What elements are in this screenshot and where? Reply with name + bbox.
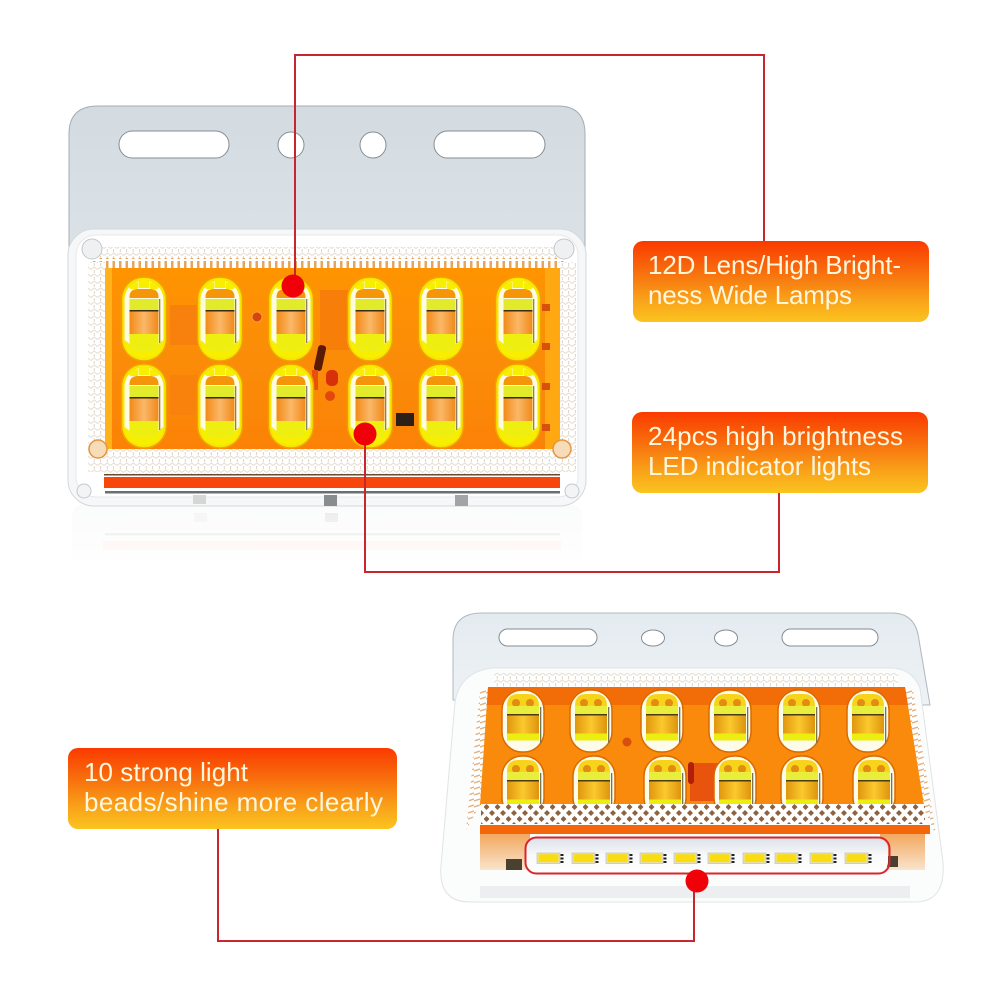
callout: 10 strong light beads [68, 748, 397, 829]
lower textured band and orange strip [480, 804, 930, 898]
leader line: lens callout [295, 55, 764, 285]
lamp beads: bottom row [122, 364, 540, 448]
lower textured band and orange strip [89, 440, 571, 506]
mounting plate with slots and holes [69, 106, 585, 250]
marker dot: light beads [686, 870, 708, 892]
callout: 10 strong light beads: beads/shine more clearly [84, 787, 383, 817]
callout: 24pcs indicator lights [632, 412, 928, 493]
product photo: top lamp, front view [68, 106, 586, 565]
mounting plate with slots and holes [453, 613, 930, 705]
callout: 24pcs indicator lights: 24pcs high brightness [648, 421, 903, 451]
leader line: indicator callout [365, 434, 779, 572]
marker dot: lens [282, 274, 304, 298]
LED strip with 10 light beads [526, 838, 888, 873]
orange reflector board [105, 268, 560, 449]
callout: 12D lens [633, 241, 929, 322]
callout: 24pcs indicator lights: LED indicator lights [648, 451, 871, 481]
clear lens housing [441, 668, 943, 902]
reflection under top lamp [72, 505, 582, 565]
callout: 10 strong light beads: 10 strong light [84, 757, 249, 787]
orange reflector board [480, 687, 924, 805]
callout: 12D lens: ness Wide Lamps [648, 280, 852, 310]
clear lens housing [68, 229, 586, 506]
lamp beads: bottom row [502, 756, 895, 818]
callout: 12D lens: 12D Lens/High Bright- [648, 250, 901, 280]
leader line: light beads callout [218, 828, 694, 941]
highlight outline around LED strip [526, 838, 890, 874]
lamp beads: top row [502, 690, 889, 752]
product photo: lower lamp, angled view [441, 613, 943, 902]
lamp beads: top row [122, 277, 540, 361]
marker dot: indicator [354, 422, 376, 446]
